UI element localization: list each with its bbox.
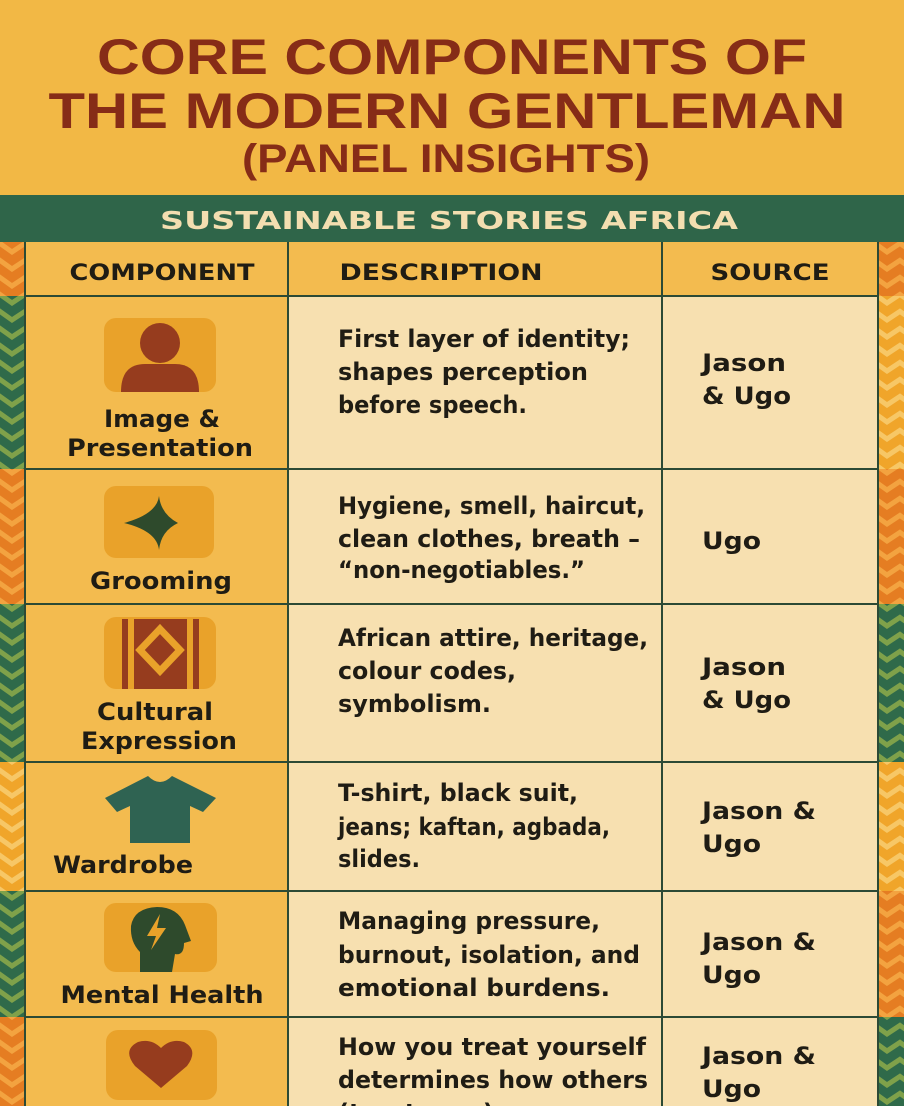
row: mental health: Mental Health (60, 981, 264, 1009)
row: self respect: Ugo (702, 1075, 761, 1103)
table header: COMPONENT (70, 261, 254, 286)
banner: SUSTAINABLE STORIES AFRICA (160, 206, 739, 235)
icon: person (104, 318, 216, 392)
row: cultural expression: African attire, heritage, (338, 624, 648, 652)
row: cultural expression: Cultural (97, 698, 213, 726)
row: wardrobe: T-shirt, black suit, (338, 779, 578, 807)
row: cultural expression: Expression (81, 727, 237, 755)
left decorative strip (0, 242, 25, 1106)
row: wardrobe: slides. (338, 845, 420, 873)
row: wardrobe: Jason & (700, 797, 816, 825)
banner (0, 195, 904, 242)
row: cultural expression (81, 617, 791, 755)
row: self respect: determines how others (338, 1066, 648, 1094)
title: CORE COMPONENTS OF (97, 29, 807, 85)
row: mental health: Managing pressure, (338, 907, 600, 935)
row: grooming: “non-negotiables.” (338, 556, 585, 584)
row: self respect: Jason & (700, 1042, 816, 1070)
icon: t-shirt (105, 776, 216, 843)
table header (70, 261, 830, 286)
table header: SOURCE (710, 261, 830, 286)
row: wardrobe: Wardrobe (53, 851, 193, 879)
row: image & presentation (67, 318, 791, 462)
row: image & presentation: Jason (700, 349, 786, 377)
right decorative strip (878, 242, 904, 1106)
row: image & presentation: shapes perception (338, 358, 588, 386)
row: mental health: emotional burdens. (338, 974, 610, 1002)
row: wardrobe (53, 776, 816, 879)
row: grooming: Ugo (702, 527, 761, 555)
row: image & presentation: Presentation (67, 434, 253, 462)
row: cultural expression: colour codes, (338, 657, 516, 685)
row: mental health: Ugo (702, 961, 761, 989)
row: image & presentation: Image & (104, 405, 220, 433)
row: mental health (60, 903, 816, 1009)
row: grooming (90, 486, 761, 595)
row: wardrobe: jeans; kaftan, agbada, (337, 813, 610, 841)
icon: head with bolt (104, 903, 217, 972)
title: (PANEL INSIGHTS) (242, 137, 650, 181)
row: self respect: How you treat yourself (338, 1033, 647, 1061)
row: grooming: clean clothes, breath – (338, 525, 640, 553)
row: mental health: burnout, isolation, and (338, 941, 640, 969)
row: self respect (106, 1030, 816, 1106)
row: wardrobe: Ugo (702, 830, 761, 858)
table (25, 242, 878, 1106)
table header: DESCRIPTION (340, 261, 542, 286)
row: image & presentation: First layer of identity; (338, 325, 630, 353)
row: mental health: Jason & (700, 928, 816, 956)
row: grooming: Grooming (90, 567, 232, 595)
title: THE MODERN GENTLEMAN (48, 83, 846, 139)
row: cultural expression: symbolism. (338, 690, 491, 718)
icon: sparkle (104, 486, 214, 558)
row: image & presentation: before speech. (338, 391, 527, 419)
row: image & presentation: & Ugo (702, 382, 791, 410)
icon: heart (106, 1030, 217, 1100)
row: grooming: Hygiene, smell, haircut, (338, 492, 645, 520)
row: cultural expression: Jason (700, 653, 786, 681)
row: cultural expression: & Ugo (702, 686, 791, 714)
title (0, 0, 904, 195)
icon: kente pattern (104, 617, 216, 689)
